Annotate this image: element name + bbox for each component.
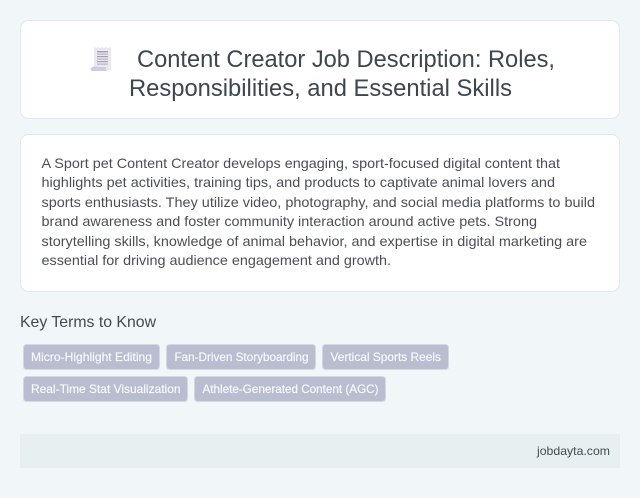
panel: description xyxy=(20,134,620,292)
chip: Athlete-Generated Content (AGC) xyxy=(194,376,386,402)
chip: Fan-Driven Storyboarding xyxy=(166,344,316,370)
description text: sports enthusiasts. They utilize video, photography, and social media platforms to build xyxy=(42,194,595,210)
description text: brand awareness and foster community interaction around active pets. Strong xyxy=(42,213,537,229)
chip: Micro-Highlight Editing xyxy=(24,344,160,370)
chip: Real-Time Stat Visualization xyxy=(24,376,188,402)
title: Content Creator Job Description: Roles, xyxy=(137,46,555,73)
icon: document scroll xyxy=(91,47,111,71)
description text: storytelling skills, knowledge of animal behavior, and expertise in digital marketing are xyxy=(42,233,587,249)
footer xyxy=(20,434,620,468)
chip: Athlete-Generated Content (AGC): Athlete-Generated Content (AGC) xyxy=(202,382,378,396)
description text xyxy=(42,155,595,268)
chip: Micro-Highlight Editing: Micro-Highlight Editing xyxy=(31,350,152,364)
description text: highlights pet activities, training tips, and products to captivate animal lovers and xyxy=(42,174,555,190)
title xyxy=(129,46,555,102)
chip: Vertical Sports Reels: Vertical Sports Reels xyxy=(330,350,441,364)
footer: jobdayta.com xyxy=(536,444,610,458)
chip: Fan-Driven Storyboarding: Fan-Driven Storyboarding xyxy=(174,350,308,364)
chip: Real-Time Stat Visualization: Real-Time Stat Visualization xyxy=(31,382,180,396)
description text: essential for driving audience engagement and growth. xyxy=(42,252,391,268)
description text: A Sport pet Content Creator develops engaging, sport-focused digital content that xyxy=(42,155,560,171)
panel: title card xyxy=(20,20,620,118)
heading: key terms: Key Terms to Know xyxy=(20,314,156,331)
title: Responsibilities, and Essential Skills xyxy=(129,75,512,102)
chip: Vertical Sports Reels xyxy=(322,344,448,370)
